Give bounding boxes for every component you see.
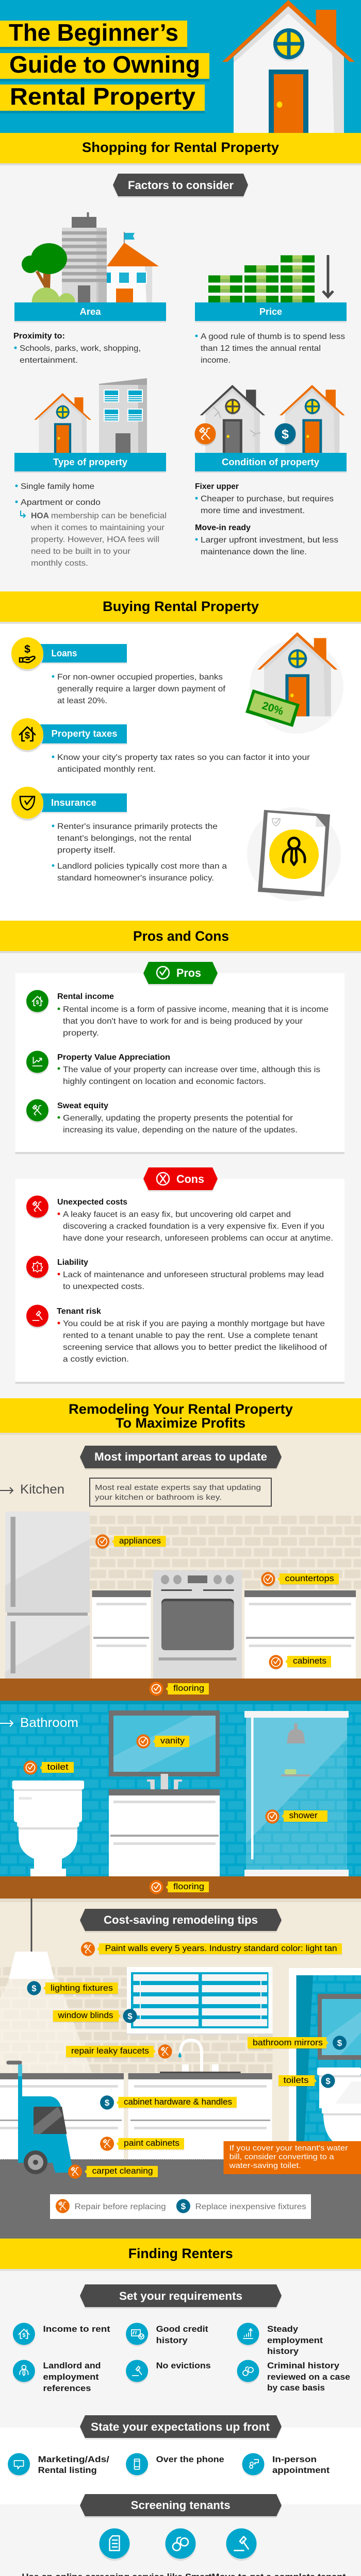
bar: price [195, 302, 347, 323]
tip: cabinet hardware: $ [105, 2098, 110, 2108]
label: cabinets: cabinets [293, 1656, 326, 1666]
requirement: steady employment history: history [267, 2346, 299, 2356]
label: most important areas [80, 1446, 282, 1470]
illustration: kitchen [0, 1512, 361, 1701]
requirement: steady employment history: employment [267, 2335, 323, 2345]
item: tenant risk: You could be at risk if you are paying a monthly mortgage but have [63, 1319, 325, 1328]
item: loans [11, 637, 226, 705]
label: most important areas: Most important areas to update [94, 1450, 267, 1463]
illustration: condition of property [195, 385, 345, 453]
label: screening tenants: Screening tenants [131, 2499, 231, 2512]
tip: toilets: toilets [284, 2076, 308, 2085]
bar: area: Area [79, 307, 102, 317]
item: tenant risk: Tenant risk [57, 1307, 101, 1316]
text: type list: Apartment or condo [21, 498, 101, 507]
text: type list: monthly costs. [31, 559, 88, 568]
item: liability: Lack of maintenance and unforeseen structural problems may lead [63, 1270, 324, 1279]
text: price rule [195, 332, 345, 365]
illustration: house with 20 percent bill: 20% [260, 700, 285, 718]
fridge [5, 1512, 90, 1679]
bar: price: Price [259, 307, 282, 317]
heading: shopping [0, 133, 361, 163]
item: property value appreciation [26, 1051, 320, 1086]
label: cost-saving remodeling tips: Cost-saving remodeling tips [104, 1913, 258, 1926]
item: loans: generally require a larger down payment of [57, 685, 226, 693]
heading: shopping: Shopping for Rental Property [82, 140, 279, 155]
text: type list [15, 482, 167, 568]
icon: shield [20, 796, 35, 810]
illustration: cost-saving room [0, 1899, 361, 2239]
tip: paint cabinets [100, 2137, 184, 2151]
bathroom beyond door [289, 1968, 361, 2142]
icons: screening reports [99, 2529, 257, 2561]
item: loans: Loans [52, 648, 77, 658]
label: cons [143, 1167, 218, 1192]
text: condition list: more time and investment. [201, 506, 305, 515]
icon: dollar badge: $ [282, 427, 289, 442]
text: type list: when it comes to maintaining your [30, 523, 165, 532]
text: type list: membership can be beneficial [51, 512, 167, 520]
item: property value appreciation: The value of your property can increase over time, although this is [63, 1065, 320, 1074]
tip: paint walls: Paint walls every 5 years. Industry standard color: light tan [105, 1944, 337, 1953]
requirement: landlord references: employment [43, 2372, 99, 2382]
faucet [147, 1774, 182, 1789]
title: Rental Property [10, 83, 195, 110]
callout: experts: Most real estate experts say that updating [95, 1484, 261, 1492]
item: loans: For non-owner occupied properties, banks [57, 673, 223, 682]
expectation: marketing: Rental listing [38, 2465, 97, 2475]
text: condition list: Fixer upper [195, 482, 239, 491]
tip: window blinds: $ [127, 2011, 133, 2021]
icon: house dollar [20, 727, 35, 741]
item: liability: to unexpected costs. [63, 1282, 144, 1291]
heading: buying [0, 591, 361, 622]
requirement: steady employment history: Steady [267, 2324, 299, 2334]
item: rental income: Rental income [57, 992, 114, 1001]
item: tenant risk: a costly eviction. [63, 1355, 129, 1364]
item: rental income: property. [63, 1029, 99, 1038]
legend [50, 2194, 311, 2219]
text: type list: Single family home [21, 482, 94, 491]
callout: experts: your kitchen or bathroom is key. [95, 1494, 222, 1502]
text: type list: property. However, HOA fees will [31, 535, 159, 544]
item: insurance: Insurance [51, 798, 96, 808]
requirement: criminal history: reviewed on a case [267, 2372, 350, 2382]
item: insurance [11, 787, 227, 883]
legend: Repair before replacing [75, 2202, 166, 2211]
label: factors to consider: Factors to consider [128, 179, 234, 192]
item: insurance: Renter's insurance primarily protects the [57, 822, 218, 831]
legend: $ [181, 2201, 186, 2211]
tip: lighting fixtures: lighting fixtures [51, 1984, 113, 1993]
tip: paint cabinets: paint cabinets [124, 2139, 179, 2148]
item: insurance: Landlord policies typically cost more than a [57, 862, 227, 871]
item: property taxes: anticipated monthly rent. [57, 765, 156, 774]
counter and cabinets [0, 2072, 272, 2159]
shower [244, 1711, 349, 1876]
tip: carpet cleaning: carpet cleaning [92, 2166, 153, 2176]
requirement: income to rent: Income to rent [43, 2324, 110, 2334]
text: condition list: Larger upfront investment, but less [201, 536, 338, 545]
requirement: landlord references: references [43, 2383, 91, 2393]
bar: condition of property: Condition of property [222, 457, 319, 467]
item: rental income: that you don't have to work for and is being produced by your [63, 1017, 303, 1026]
heading: buying: Buying Rental Property [103, 599, 259, 614]
expectation: over the phone: Over the phone [156, 2454, 224, 2464]
label: state your expectations [80, 2415, 282, 2439]
requirement: criminal history: by case basis [267, 2383, 325, 2393]
heading: remodeling: Remodeling Your Rental Property [69, 1401, 293, 1417]
stove [153, 1570, 242, 1679]
item: sweat equity: Generally, updating the property presents the potential for [63, 1114, 293, 1123]
requirement: income to rent [13, 2323, 110, 2346]
item: property taxes: Property taxes [52, 728, 118, 739]
tip: lighting fixtures [27, 1981, 118, 1995]
requirement: good credit history [126, 2323, 208, 2346]
toilet [12, 1781, 84, 1876]
label: cost-saving remodeling tips [80, 1909, 282, 1933]
tip: cabinet hardware [100, 2095, 237, 2110]
icon: sub-arrow [21, 511, 25, 518]
label: set your requirements: Set your requirements [119, 2290, 242, 2302]
text: condition list: maintenance down the line. [201, 548, 307, 556]
section: shopping for rental property [0, 133, 361, 591]
text: price rule: than 12 times the annual rental [201, 344, 321, 353]
tip: window blinds [53, 2009, 137, 2023]
section: finding renters [0, 2239, 361, 2576]
legend: Replace inexpensive fixtures [195, 2202, 306, 2211]
bar: type of property [14, 453, 166, 473]
right counter [244, 1590, 356, 1679]
heading: remodeling: To Maximize Profits [116, 1415, 245, 1431]
title: Guide to Owning [9, 51, 200, 78]
heading: finding renters: Finding Renters [128, 2246, 233, 2261]
tip: toilets: $ [325, 2076, 331, 2086]
tip: lighting fixtures: $ [31, 1984, 37, 1993]
label: shower [265, 1809, 327, 1824]
label: cons: Cons [176, 1173, 204, 1185]
label: shower: shower [289, 1811, 318, 1820]
tip: paint walls [81, 1942, 342, 1956]
requirement: landlord references [13, 2360, 101, 2393]
requirement: no evictions: No evictions [156, 2361, 211, 2370]
callout: experts [90, 1478, 271, 1506]
left counter [92, 1590, 151, 1679]
item: rental income [26, 990, 329, 1038]
panel: pros [15, 962, 344, 1154]
bar: area [14, 302, 166, 323]
item: sweat equity: increasing its value, depending on the nature of the updates. [63, 1126, 298, 1134]
label: appliances [95, 1534, 166, 1549]
text: price rule: income. [201, 356, 231, 365]
item: unexpected costs [26, 1195, 333, 1243]
label: bathroom flooring: flooring [173, 1882, 204, 1891]
label: kitchen arrow [0, 1482, 64, 1497]
item: loans: at least 20%. [57, 697, 107, 705]
text: condition list: Move-in ready [195, 523, 251, 532]
illustration: bathroom [0, 1701, 361, 1899]
label: kitchen flooring: flooring [173, 1684, 204, 1693]
label: screening tenants [80, 2494, 282, 2518]
tip: carpet cleaning [68, 2164, 158, 2179]
label: vanity: vanity [160, 1736, 185, 1745]
item: unexpected costs: have done your research, unforeseen problems can occur at anytime. [63, 1234, 333, 1243]
requirement: criminal history [237, 2360, 350, 2393]
item: property taxes [11, 718, 310, 774]
illustration: type of property [34, 378, 147, 453]
faucet with drip [178, 2040, 219, 2072]
item: tenant risk: screening service that allows you to better predict the likelihood of [63, 1343, 327, 1352]
item: sweat equity: Sweat equity [57, 1101, 108, 1110]
icon: hero house [222, 0, 355, 139]
text: condition list [195, 482, 338, 556]
label: countertops: countertops [285, 1574, 334, 1583]
expectation: in-person [242, 2453, 330, 2477]
tip: window blinds: window blinds [57, 2011, 113, 2020]
text: type list: HOA [31, 512, 49, 520]
section: remodeling [0, 1398, 361, 2239]
label: kitchen flooring [150, 1682, 209, 1696]
icon: hand with dollar: $ [24, 643, 30, 655]
callout: water bill: If you cover your tenant's water [229, 2144, 348, 2153]
item: unexpected costs: A leaky faucet is an easy fix, but uncovering old carpet and [63, 1210, 291, 1219]
item: unexpected costs: Unexpected costs [57, 1198, 127, 1207]
illustration: price [208, 255, 333, 303]
requirement: no evictions [126, 2360, 211, 2383]
callout: water bill: water-saving toilet. [228, 2161, 301, 2170]
requirement: good credit history: history [156, 2335, 188, 2345]
label: vanity [136, 1734, 189, 1749]
item: tenant risk [26, 1304, 327, 1364]
heading: finding renters [0, 2239, 361, 2269]
tip: cabinet hardware: cabinet hardware & handles [124, 2097, 232, 2107]
text: condition list: Cheaper to purchase, but requires [201, 495, 334, 503]
tip: bathroom mirrors: bathroom mirrors [253, 2038, 323, 2047]
requirement: good credit history: Good credit [156, 2324, 208, 2334]
expectation: over the phone [126, 2453, 224, 2477]
expectation: marketing [8, 2453, 109, 2477]
expectation: in-person: In-person [272, 2454, 317, 2464]
bar: type of property: Type of property [53, 457, 127, 467]
expectation: in-person: appointment [272, 2465, 330, 2475]
tip: repair leaky faucets: repair leaky faucets [71, 2046, 149, 2056]
label: countertops [261, 1572, 339, 1587]
label: cabinets [269, 1655, 331, 1670]
requirement: steady employment history [237, 2323, 323, 2356]
label: factors to consider [113, 174, 248, 198]
title: The Beginner’s [9, 19, 178, 46]
text: proximity: entertainment. [20, 356, 78, 365]
label: pros: Pros [176, 967, 201, 979]
item: insurance: property itself. [57, 846, 116, 855]
text: type list: need to be built in to your [31, 547, 131, 556]
icon: house dollar: $ [25, 730, 30, 741]
label: bathroom arrow: Bathroom [20, 1716, 78, 1730]
label: toilet: toilet [47, 1762, 69, 1772]
tip: bathroom mirrors: $ [337, 2038, 342, 2048]
requirement: income to rent: $ [22, 2332, 25, 2338]
icon: hand with dollar [20, 643, 35, 663]
tip: repair leaky faucets [66, 2044, 172, 2059]
requirement: landlord references: Landlord and [43, 2361, 101, 2370]
heading: pros and cons: Pros and Cons [133, 928, 229, 944]
label: toilet [24, 1760, 74, 1775]
panel: cons [15, 1167, 344, 1384]
section: buying rental property [0, 591, 361, 921]
bar: condition of property [195, 453, 347, 473]
vacuum [8, 2063, 73, 2174]
item: insurance: tenant's belongings, not the rental [57, 834, 191, 843]
text: price rule: A good rule of thumb is to spend less [201, 332, 345, 341]
item: liability [26, 1256, 324, 1291]
icon: dollar badge [274, 423, 296, 446]
expectation: marketing: Marketing/Ads/ [38, 2454, 109, 2464]
requirement: criminal history: Criminal history [267, 2361, 340, 2370]
item: sweat equity [26, 1099, 298, 1134]
mirror [109, 1710, 220, 1776]
vanity cabinet [109, 1789, 220, 1876]
tip: bathroom mirrors [248, 2036, 347, 2050]
header hero [0, 0, 361, 139]
heading: remodeling [0, 1398, 361, 1433]
text: proximity [13, 332, 141, 365]
illustration: insurance document [247, 807, 341, 901]
illustration: house with 20 percent bill [245, 632, 343, 734]
label: set your requirements [80, 2284, 282, 2309]
text: proximity: Proximity to: [13, 332, 65, 341]
label: pros [143, 962, 218, 986]
icon: repair badge [195, 423, 216, 446]
text: proximity: Schools, parks, work, shopping, [20, 344, 141, 353]
item: tenant risk: rented to a tenant unable to pay the rent. Use a complete tenant [63, 1331, 318, 1340]
item: liability: Liability [57, 1258, 88, 1267]
label: state your expectations: State your expectations up front [91, 2420, 270, 2433]
label: appliances: appliances [119, 1536, 161, 1546]
item: property taxes: Know your city's property tax rates so you can factor it into your [57, 753, 310, 762]
item: rental income: Rental income is a form of passive income, meaning that it is income [63, 1005, 329, 1014]
carpet [0, 2159, 361, 2239]
heading: pros and cons [0, 921, 361, 951]
label: kitchen arrow: Kitchen [20, 1482, 64, 1497]
window with blinds [127, 1967, 273, 2035]
item: insurance: standard homeowner's insurance policy. [57, 874, 214, 883]
tip: toilets [278, 2074, 335, 2088]
item: property value appreciation: Property Value Appreciation [57, 1053, 170, 1062]
item: rental income: $ [36, 999, 39, 1006]
callout: water bill [224, 2141, 361, 2174]
callout: water bill: bill, consider converting to a [229, 2153, 334, 2161]
item: property value appreciation: highly contingent on location and economic factors. [63, 1077, 266, 1086]
illustration: area [22, 212, 159, 317]
title [0, 19, 209, 113]
item: unexpected costs: discovering a cracked foundation is a very expensive fix. Even if you [63, 1222, 324, 1231]
lamp [9, 1899, 54, 1979]
label: bathroom flooring [150, 1880, 209, 1894]
section: pros and cons [0, 921, 361, 1398]
